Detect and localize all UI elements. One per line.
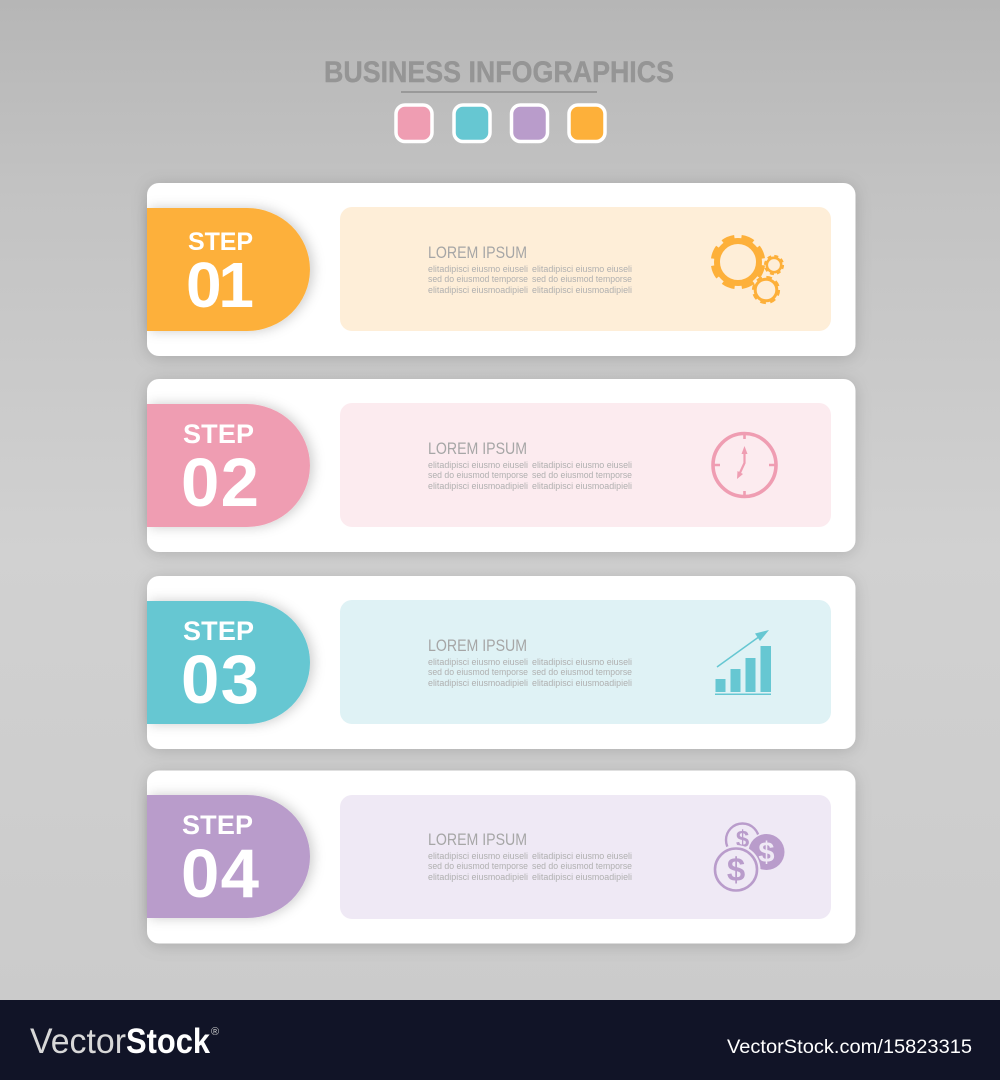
text block 3: elitadipisci eiusmoadipieli [428,678,528,688]
icon: growth chart [715,630,771,695]
text block 2 [428,439,632,491]
text block 1: elitadipisci eiusmo eiuseli [428,264,528,274]
text block 4: elitadipisci eiusmoadipieli [532,872,632,882]
text block 3: elitadipisci eiusmo eiuseli [532,657,632,667]
text block 4 [428,830,632,882]
step label 2: STEP [183,419,254,449]
panel: step 01 [147,183,856,356]
content box 3 [340,600,831,724]
step label 3: STEP [183,616,254,646]
panel: step 03 [147,576,856,749]
text block 2: elitadipisci eiusmoadipieli [428,481,528,491]
footer logo: Stock [126,1022,210,1061]
text block 1: sed do eiusmod temporse [532,274,632,284]
text block 3: sed do eiusmod temporse [428,667,528,677]
text block 3: sed do eiusmod temporse [532,667,632,677]
colour swatches [396,105,605,142]
footer bar [0,1000,1000,1080]
footer logo: ® [211,1026,219,1038]
text block 4: elitadipisci eiusmo eiuseli [428,851,528,861]
icon: coins: $ [736,826,750,853]
tab 2 [147,404,310,527]
step label 4: STEP [182,810,253,840]
text block 1: sed do eiusmod temporse [428,274,528,284]
text block 4: sed do eiusmod temporse [428,861,528,871]
step number 2: 02 [181,444,259,521]
icon: clock [713,433,776,497]
card 4 [147,770,856,944]
text block 3 [428,636,632,688]
panel: step 02 [147,379,856,552]
tab 3 [147,601,310,724]
title: BUSINESS INFOGRAPHICS [324,56,674,89]
step number 1: 01 [186,249,254,321]
step number 3: 03 [181,641,259,718]
text block 2: elitadipisci eiusmoadipieli [532,481,632,491]
text block 2: elitadipisci eiusmo eiuseli [428,460,528,470]
text block 3: LOREM IPSUM [428,636,527,655]
content box 2 [340,403,831,527]
content box 1 [340,207,831,331]
icon: coins: $ [727,851,745,888]
text block 4: elitadipisci eiusmoadipieli [428,872,528,882]
step number 4: 04 [181,835,259,912]
step label 1: STEP [188,228,253,256]
text block 2: sed do eiusmod temporse [532,470,632,480]
text block 4: LOREM IPSUM [428,830,527,849]
icon: gears [710,234,783,303]
text block 1: elitadipisci eiusmoadipieli [532,285,632,295]
footer image id: VectorStock.com/15823315 [727,1037,972,1058]
text block 3: elitadipisci eiusmoadipieli [532,678,632,688]
card 2 [147,379,856,552]
content box 4 [340,795,831,919]
footer logo [30,1022,219,1061]
icon: coins: $ [758,837,775,869]
footer logo: Vector [30,1022,126,1061]
text block 2: elitadipisci eiusmo eiuseli [532,460,632,470]
text block 2: LOREM IPSUM [428,439,527,458]
text block 1: elitadipisci eiusmoadipieli [428,285,528,295]
text block 1: elitadipisci eiusmo eiuseli [532,264,632,274]
card 3 [147,576,856,749]
text block 3: elitadipisci eiusmo eiuseli [428,657,528,667]
icon: coins [712,824,786,894]
text block 2: sed do eiusmod temporse [428,470,528,480]
card 1 [147,183,856,356]
tab 1 [147,208,310,331]
panel: step 04 [147,770,856,944]
tab 4 [147,795,310,918]
text block 1: LOREM IPSUM [428,243,527,262]
text block 4: elitadipisci eiusmo eiuseli [532,851,632,861]
text block 1 [428,243,632,295]
text block 4: sed do eiusmod temporse [532,861,632,871]
